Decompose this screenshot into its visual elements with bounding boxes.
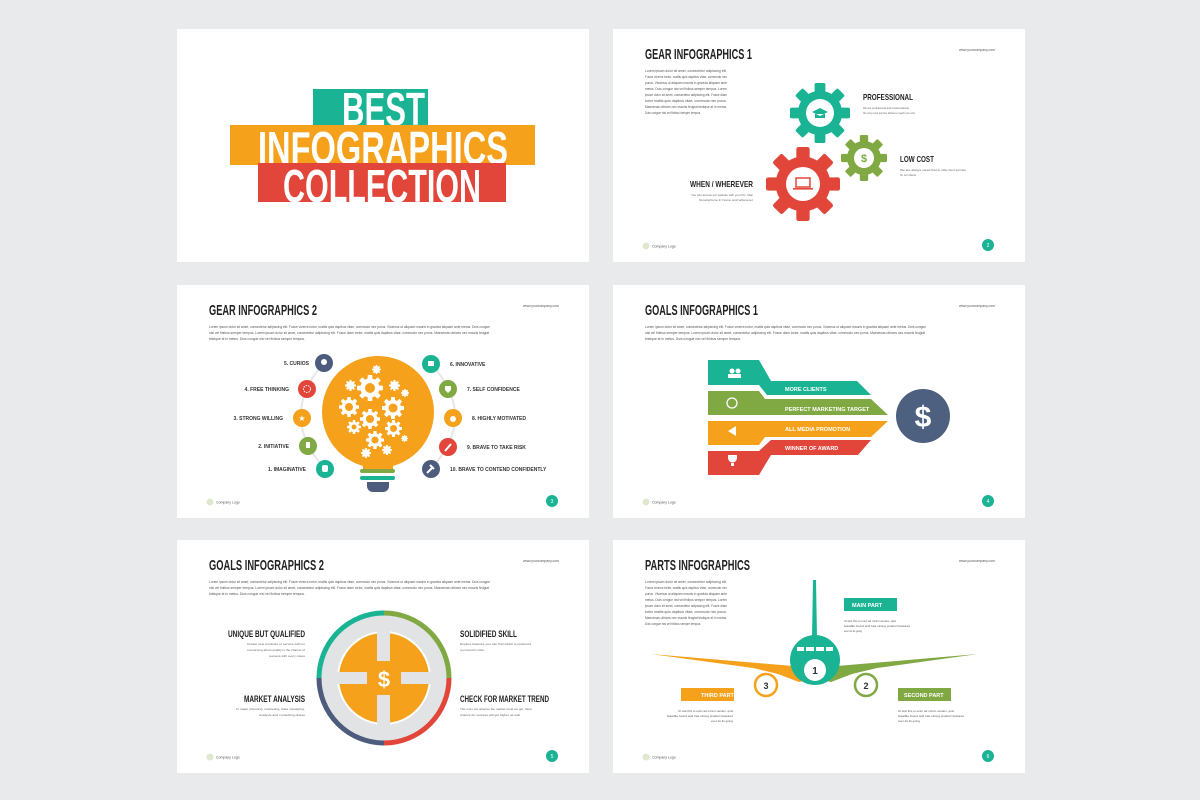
- body text: tristique at in metus. Duis congue nisi vel finibus semper tempus.: [645, 337, 741, 341]
- label: second part: ever do its going: [898, 719, 920, 723]
- body text: ipsum dolor sit amet, consectetur adipiscing elit. Fusce diam: [645, 93, 727, 97]
- left items: 1. IMAGINATIVE: [268, 467, 307, 473]
- ribbon: winner of award: WINNER OF AWARD: [785, 446, 838, 452]
- ribbon: winner of award: [708, 440, 871, 475]
- heading: GEAR INFOGRAPHICS 1: [645, 46, 752, 63]
- right items: 9. BRAVE TO TAKE RISK: [467, 445, 526, 451]
- left items: [234, 354, 334, 478]
- left items: 5. CURIOS: [284, 361, 310, 367]
- label: third part: ever do its going: [711, 719, 733, 723]
- footer logo: [642, 754, 676, 760]
- label: unique but qualified: UNIQUE BUT QUALIFIED: [228, 629, 305, 639]
- label: unique but qualified: concerning about quality in the chance of: [247, 648, 305, 652]
- label: unique but qualified: Create new products or service with us: [247, 642, 306, 646]
- url: www.yourcompany.com: [523, 559, 559, 563]
- label: unique but qualified: [228, 629, 306, 658]
- connecting arcs: [301, 363, 455, 469]
- body text: nisi vel finibus semper tempus. Lorem ipsum dolor sit amet, consectetur adipiscing elit. Fusce diam tortor, mattis quis dapibus vitae, commodo nec purus. Maecenas ultrices nec mauris feugiat: [209, 586, 489, 590]
- footer logo: [642, 242, 676, 250]
- gear: when/wherever (red): [766, 147, 840, 221]
- title block: BEST: BEST: [342, 83, 425, 135]
- body text: Fusce viverra tortor, mattis quis dapibus vitae, commodo nec: [645, 586, 727, 590]
- body text: [645, 580, 727, 626]
- label: third part: [667, 688, 735, 723]
- footer logo: Company Logo: [216, 500, 240, 504]
- label: professional: PROFESSIONAL: [863, 92, 913, 102]
- slide 3: gear infographics 2: [177, 285, 589, 518]
- body text: tortor mattis quis dapibus vitae, commodo nec purus.: [645, 610, 727, 614]
- label: market analysis: analysis and consulting phase: [259, 713, 305, 717]
- ribbon: all media promotion: [708, 421, 888, 445]
- footer logo: [642, 498, 676, 506]
- dollar circle: [896, 389, 950, 443]
- label: low cost: [900, 154, 966, 177]
- airplane: 3: [763, 681, 769, 691]
- body text: [645, 325, 926, 341]
- heading: GOALS INFOGRAPHICS 2: [209, 557, 324, 574]
- title block: COLLECTION: [258, 160, 506, 212]
- label: solidified skill: [460, 629, 531, 652]
- label: main part: feasible found and has strong product features: [844, 624, 911, 628]
- heading: PARTS INFOGRAPHICS: [645, 557, 750, 574]
- page number: [546, 750, 558, 762]
- label: when / wherever: You can access our website with your PC, Mac: [691, 193, 753, 197]
- body text: nisi vel finibus semper tempus. Lorem ipsum dolor sit amet, consectetur adipiscing elit. Fusce diam tortor, mattis quis dapibus vitae, commodo nec purus. Maecenas ultrices nec mauris feugiat: [209, 331, 489, 335]
- body text: ipsum dolor sit amet, consectetur adipiscing elit. Fusce diam: [645, 604, 727, 608]
- label: market analysis: MARKET ANALYSIS: [244, 694, 305, 704]
- footer logo: Company Logo: [216, 756, 240, 760]
- body text: Lorem ipsum dolor sit amet, consectetur adipiscing elit. Fusce viverra tortor, mattis quis dapibus vitae, commodo nec purus. Vivamus ut aliquam mauris in gravida aliquam ante metus. Duis congue: [209, 580, 490, 584]
- label: check for market trend: CHECK FOR MARKET TREND: [460, 694, 549, 704]
- label: market analysis: In major planning, marketing, data managing,: [236, 707, 305, 711]
- gear: professional (teal): [790, 83, 850, 143]
- body text: metus. Duis congue nisi vel finibus semper tempus. Lorem: [645, 598, 727, 602]
- body text: tristique at in metus. Duis congue nisi vel finibus semper tempus.: [209, 592, 305, 596]
- label: low cost: LOW COST: [900, 154, 935, 164]
- body text: Maecenas ultrices nec mauris feugiat tristique at in metus.: [645, 616, 727, 620]
- footer logo: [206, 498, 240, 506]
- label: when / wherever: WHEN / WHEREVER: [690, 179, 753, 189]
- body text: Lorem ipsum dolor sit amet, consectetur adipiscing elit. Fusce viverra tortor, mattis quis dapibus vitae, commodo nec purus. Vivamus ut aliquam mauris in gravida aliquam ante metus. Duis congue: [209, 325, 490, 329]
- page number: [982, 750, 994, 762]
- page number: 4: [987, 499, 990, 505]
- body text: Lorem ipsum dolor sit amet, consectetur adipiscing elit.: [645, 69, 727, 73]
- ribbon: all media promotion: ALL MEDIA PROMOTION: [785, 427, 850, 433]
- body text: purus. Vivamus ut aliquam mauris in gravida aliquam ante: [645, 81, 727, 85]
- airplane: 2: [863, 681, 869, 691]
- body text: [209, 325, 490, 341]
- footer logo: Company Logo: [652, 500, 676, 504]
- ribbon: perfect marketing target: [708, 391, 888, 415]
- slide 6: parts infographics: [613, 540, 1025, 773]
- slide 1: cover: [177, 29, 589, 262]
- right items: 6. INNOVATIVE: [450, 362, 486, 368]
- label: professional: the only most service allows to reach you only: [863, 111, 915, 115]
- label: second part: feasible found and has strong product features: [898, 714, 965, 718]
- body text: Lorem ipsum dolor sit amet, consectetur adipiscing elit.: [645, 580, 727, 584]
- label: check for market trend: chance for success will get higher as well: [460, 713, 520, 717]
- label: solidified skill: Explore features you can find which is preferred: [460, 642, 531, 646]
- label: third part: Ut wisi this to enim ad minim veniam, quis: [678, 709, 733, 713]
- label: check for market trend: The more we observe the market trend we get, there: [460, 707, 532, 711]
- page number: 3: [551, 499, 554, 505]
- body text: nisi vel finibus semper tempus. Lorem ipsum dolor sit amet, consectetur adipiscing elit. Fusce diam tortor, mattis quis dapibus vitae, commodo nec purus. Maecenas ultrices nec mauris feugiat: [645, 331, 925, 335]
- heading: GOALS INFOGRAPHICS 1: [645, 302, 758, 319]
- footer logo: Company Logo: [652, 244, 676, 248]
- left items: 3. STRONG WILLING: [234, 416, 283, 422]
- right items: 10. BRAVE TO CONTEND CONFIDENTLY: [450, 467, 547, 473]
- label: professional: [863, 92, 915, 115]
- label: main part: Ut wisi this to enim ad minim veniam, quis: [844, 619, 896, 623]
- gear: low cost (green): [841, 135, 887, 181]
- right items: 7. SELF CONFIDENCE: [467, 387, 520, 393]
- label: professional: We are professional and trusted website: [863, 106, 909, 110]
- label: when / wherever: Smartphone in home and wherever: [699, 198, 753, 202]
- body text: Lorem ipsum dolor sit amet, consectetur adipiscing elit. Fusce viverra tortor, mattis quis dapibus vitae, commodo nec purus. Vivamus ut aliquam mauris in gravida aliquam ante metus. Duis congue: [645, 325, 926, 329]
- right items: 8. HIGHLY MOTIVATED: [472, 416, 526, 422]
- url: www.yourcompany.com: [959, 48, 995, 52]
- page number: 5: [551, 754, 554, 760]
- ribbon: perfect marketing target: PERFECT MARKETING TARGET: [785, 407, 870, 413]
- label: solidified skill: SOLIDIFIED SKILL: [460, 629, 517, 639]
- label: check for market trend: [460, 694, 549, 717]
- url: www.yourcompany.com: [959, 559, 995, 563]
- label: second part: SECOND PART: [904, 693, 944, 699]
- heading: GEAR INFOGRAPHICS 2: [209, 302, 317, 319]
- body text: metus. Duis congue nisi vel finibus semper tempus. Lorem: [645, 87, 727, 91]
- right items: [422, 355, 547, 478]
- ribbon: more clients: [708, 360, 871, 395]
- body text: Duis congue nisi vel finibus semper tempus.: [645, 622, 701, 626]
- slide 2: gear infographics 1: [613, 29, 1025, 262]
- ribbon: more clients: MORE CLIENTS: [785, 387, 827, 393]
- page number: 6: [987, 754, 990, 760]
- body text: [209, 580, 490, 596]
- body text: [645, 69, 727, 115]
- label: solidified skill: you found for other: [460, 648, 484, 652]
- label: main part: MAIN PART: [852, 603, 883, 609]
- page number: 2: [987, 243, 990, 249]
- label: third part: feasible found and has strong product features: [667, 714, 734, 718]
- left items: ★: [298, 414, 306, 423]
- url: www.yourcompany.com: [959, 304, 995, 308]
- left items: 4. FREE THINKING: [245, 387, 289, 393]
- body text: Fusce viverra tortor, mattis quis dapibus vitae, commodo nec: [645, 75, 727, 79]
- footer logo: Company Logo: [652, 756, 676, 760]
- left items: 2. INITIATIVE: [258, 444, 290, 450]
- page number: [982, 239, 994, 251]
- airplane: 1: [812, 666, 818, 677]
- light bulb: [322, 356, 434, 492]
- label: second part: Ut wisi this to enim ad minim veniam, quis: [898, 709, 954, 713]
- url: www.yourcompany.com: [523, 304, 559, 308]
- label: main part: ever do its going: [844, 629, 862, 633]
- title block: BEST: [313, 83, 428, 135]
- dollar circle: $: [915, 401, 932, 434]
- label: main part: [844, 598, 911, 633]
- airplane: [651, 580, 978, 696]
- label: market analysis: [236, 694, 305, 717]
- label: unique but qualified: success with every cases: [269, 654, 306, 658]
- label: low cost: We are always cared that to offer best service: [900, 168, 966, 172]
- body text: tristique at in metus. Duis congue nisi vel finibus semper tempus.: [209, 337, 305, 341]
- gear: low cost (green): $: [861, 153, 867, 165]
- body text: Duis congue nisi vel finibus semper tempus.: [645, 111, 701, 115]
- title block: COLLECTION: COLLECTION: [283, 160, 481, 212]
- body text: tortor mattis quis dapibus vitae, commodo nec purus.: [645, 99, 727, 103]
- label: second part: [898, 688, 965, 723]
- page number: [546, 495, 558, 507]
- footer logo: [206, 754, 240, 760]
- target diagram: $: [378, 667, 390, 692]
- label: third part: THIRD PART: [701, 693, 735, 699]
- body text: Maecenas ultrices nec mauris feugiat tristique at in metus.: [645, 105, 727, 109]
- target diagram: [319, 613, 449, 743]
- slide 4: goals infographics 1: [613, 285, 1025, 518]
- label: when / wherever: [690, 179, 753, 202]
- slide 5: goals infographics 2: [177, 540, 589, 773]
- body text: purus. Vivamus ut aliquam mauris in gravida aliquam ante: [645, 592, 727, 596]
- page number: [982, 495, 994, 507]
- label: low cost: for our clients: [900, 173, 916, 177]
